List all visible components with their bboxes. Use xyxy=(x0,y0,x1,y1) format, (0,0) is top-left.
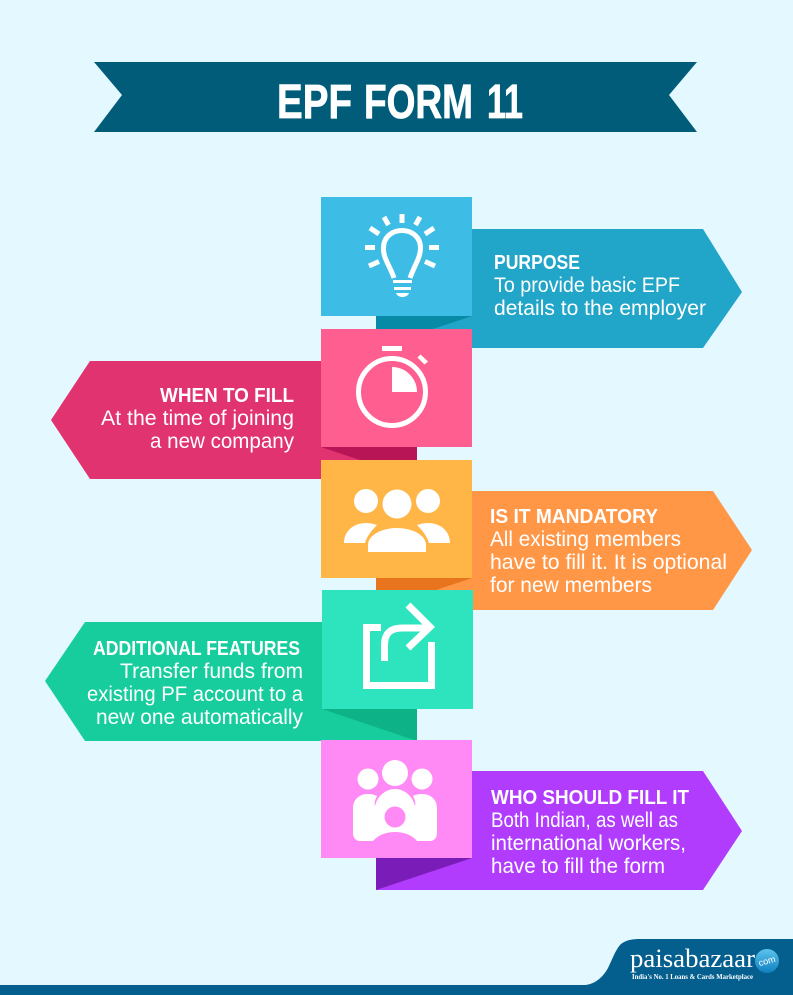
fold shadow xyxy=(376,316,472,348)
icon: group xyxy=(344,489,450,552)
title: FORM xyxy=(364,76,473,129)
panel: who should fill it xyxy=(321,740,742,890)
icon: stopwatch xyxy=(358,346,428,426)
fold shadow xyxy=(376,858,472,890)
text: when to fill xyxy=(101,385,294,453)
icon: share xyxy=(366,605,432,686)
text: who should fill it: WHO SHOULD FILL IT xyxy=(491,787,689,809)
panel: when to fill xyxy=(51,329,472,479)
icon: people xyxy=(353,760,437,841)
fold shadow xyxy=(321,447,417,479)
text: additional features: existing PF account to a xyxy=(87,683,303,706)
icon: light bulb xyxy=(365,214,439,297)
text: is it mandatory: have to fill it. It is optional xyxy=(490,551,727,574)
arrow: is it mandatory xyxy=(376,491,752,610)
text: when to fill: At the time of joining xyxy=(101,407,294,430)
text: is it mandatory: IS IT MANDATORY xyxy=(490,506,659,528)
arrow: who should fill it xyxy=(376,771,742,890)
fold shadow xyxy=(322,709,417,741)
icon box: who should fill it xyxy=(321,740,472,858)
text: who should fill it: international workers, xyxy=(491,832,686,855)
text: when to fill: a new company xyxy=(150,430,294,453)
icon box: purpose xyxy=(321,197,472,316)
icon box: additional features xyxy=(322,590,473,709)
icon box: when to fill xyxy=(321,329,472,447)
text: who should fill it xyxy=(491,787,689,878)
text: who should fill it: have to fill the form xyxy=(491,855,665,878)
title xyxy=(277,76,523,129)
text: is it mandatory xyxy=(490,506,727,597)
logo: com badge: com xyxy=(757,954,777,968)
title: EPF xyxy=(277,76,352,129)
arrow: additional features xyxy=(45,622,417,741)
text: who should fill it: Both Indian, as well as xyxy=(491,809,678,832)
title banner xyxy=(94,62,697,132)
text: is it mandatory: All existing members xyxy=(490,528,681,551)
footer with logo xyxy=(0,939,793,995)
footer band xyxy=(0,939,793,995)
text: additional features: new one automatically xyxy=(96,706,303,729)
text: purpose: details to the employer xyxy=(494,297,706,320)
text: additional features xyxy=(87,638,303,729)
logo: paisabazaar: paisabazaar xyxy=(630,944,755,973)
title: 11 xyxy=(487,76,523,129)
logo tagline: India's No. 1 Loans & Cards Marketplace xyxy=(632,972,754,981)
icon box: is it mandatory xyxy=(321,460,472,578)
panel: purpose xyxy=(321,197,742,348)
fold shadow xyxy=(376,578,472,610)
text: purpose xyxy=(494,252,706,320)
text: when to fill: WHEN TO FILL xyxy=(160,385,294,407)
panel: is it mandatory xyxy=(321,460,752,610)
text: additional features: ADDITIONAL FEATURES xyxy=(93,638,300,660)
text: purpose: To provide basic EPF xyxy=(494,274,680,297)
text: is it mandatory: for new members xyxy=(490,574,652,597)
logo: com badge xyxy=(755,949,779,973)
text: additional features: Transfer funds from xyxy=(120,660,303,683)
arrow: when to fill xyxy=(51,361,417,479)
text: purpose: PURPOSE xyxy=(494,252,580,274)
arrow: purpose xyxy=(376,229,742,348)
panel: additional features xyxy=(45,590,473,741)
